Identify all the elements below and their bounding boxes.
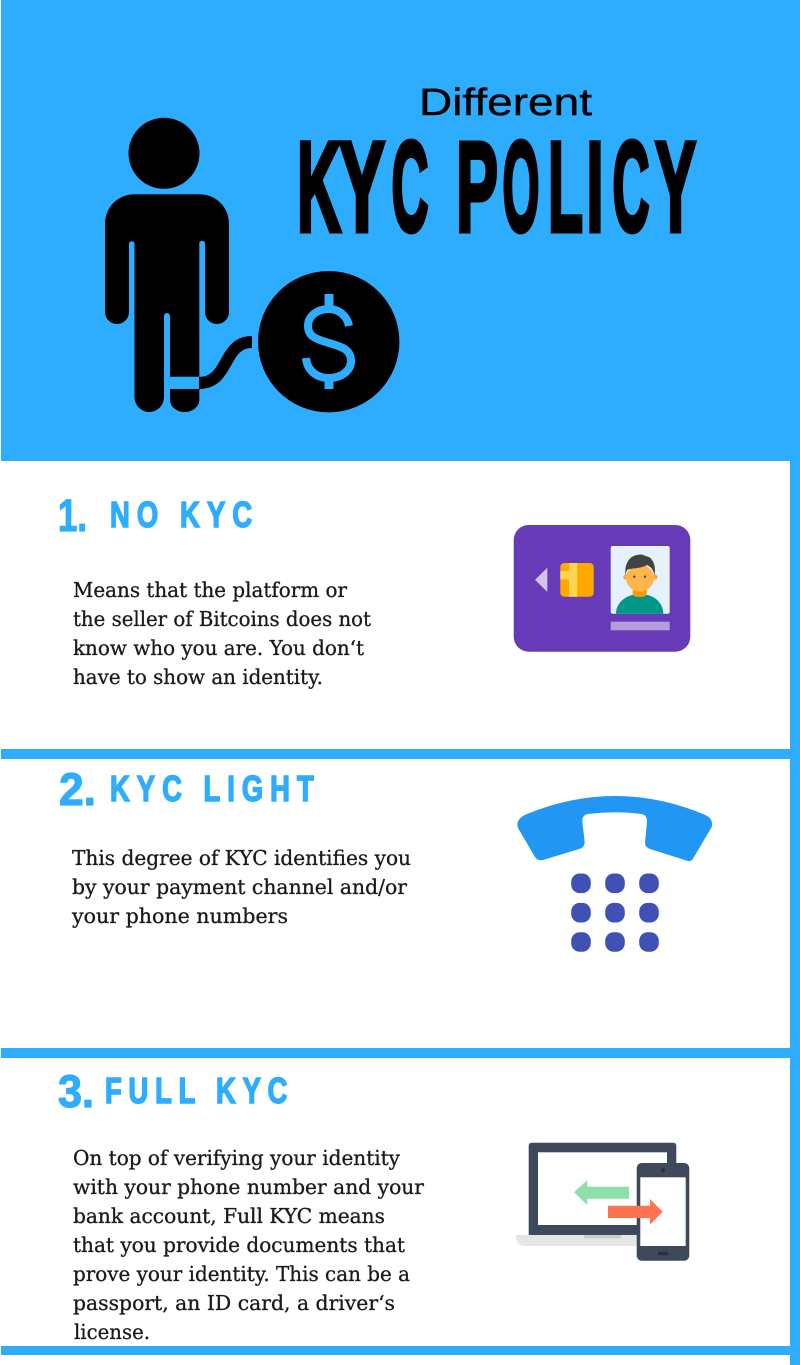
title: KYC POLICY: C [612,116,650,259]
title: KYC POLICY: I [586,116,604,259]
divider: right edge bar [790,461,800,1365]
number 1: 1. [58,490,87,541]
title: KYC POLICY: L [548,116,583,259]
heading: No KYC: NO KYC [110,494,252,535]
text block: No KYC description: Means that the platform or [73,578,347,602]
number 3: 3. [58,1066,94,1117]
title: KYC POLICY: Y [339,116,385,259]
text block: No KYC description: have to show an identity. [73,665,323,689]
heading: Different: Different [419,82,593,124]
text block: Full KYC description: prove your identity. This can be a [73,1262,410,1286]
text block: Full KYC description: license. [74,1320,150,1344]
text block: Full KYC description: passport, an ID card, a driver‘s [73,1291,395,1315]
title: KYC POLICY: K [297,116,341,259]
icon: phone handset and keypad [517,796,712,952]
icon: ID card [514,525,690,652]
text block: No KYC description [73,578,372,689]
icon: person chained to dollar coin [105,118,399,412]
text block: KYC Light description: your phone numbers [71,904,288,928]
panel: Full KYC [1,1048,800,1344]
panel: KYC Light [1,749,800,952]
text block: Full KYC description: that you provide documents that [73,1233,406,1257]
text block: KYC Light description: by your payment channel and/or [72,875,407,899]
text block: No KYC description: know who you are. You don‘t [73,636,365,660]
title: KYC POLICY: P [456,116,498,259]
text block: Full KYC description: with your phone number and your [73,1175,424,1199]
text block: Full KYC description: On top of verifying your identity [73,1146,400,1170]
text block: Full KYC description [73,1146,424,1344]
number 2: 2. [59,764,96,815]
panel: header: Y [655,116,696,259]
text block: No KYC description: the seller of Bitcoins does not [73,607,372,631]
icon: laptop and phone transfer [516,1143,689,1261]
divider: bottom bar [1,1346,800,1355]
panel: No KYC [58,490,690,689]
heading: Full KYC: FULL KYC [105,1070,287,1111]
panel: header [1,0,800,461]
heading: KYC Light: KYC LIGHT [110,768,314,809]
title: KYC POLICY: C [392,116,428,259]
title: KYC POLICY: O [502,116,540,259]
text block: KYC Light description: This degree of KYC identifies you [72,846,411,870]
text block: KYC Light description [71,846,411,928]
text block: Full KYC description: bank account, Full KYC means [73,1204,385,1228]
